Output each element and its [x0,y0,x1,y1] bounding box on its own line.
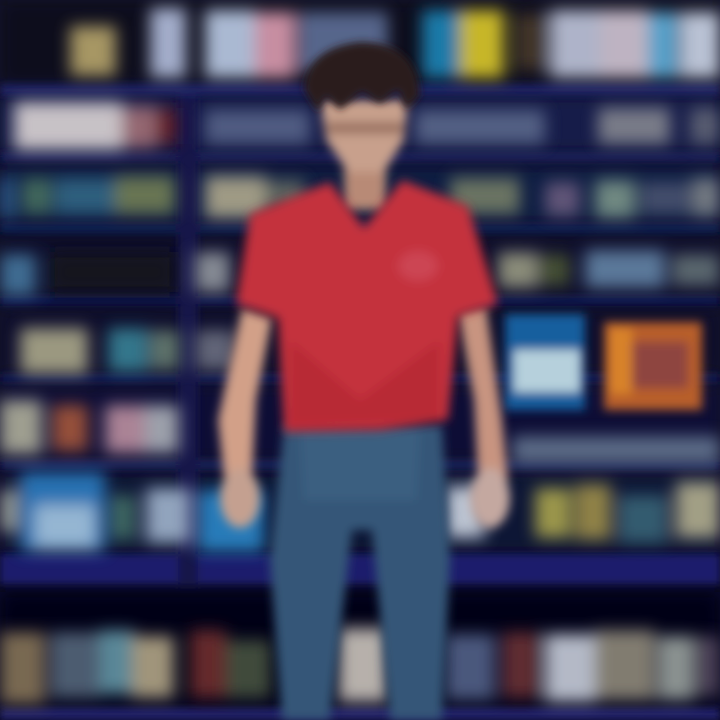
row 4 [0,254,36,296]
row 7 [0,490,18,532]
person [218,42,510,720]
hair [304,42,420,112]
red t-shirt [236,180,498,432]
row 2 [14,102,122,150]
row 6 [0,400,42,454]
posters on right [505,314,702,410]
legs: jeans [270,425,450,720]
arms [218,306,510,528]
row 5 [20,328,88,374]
row 3 [0,178,14,218]
neck and head [320,100,408,210]
bottom row [0,632,45,704]
top row [70,26,116,76]
